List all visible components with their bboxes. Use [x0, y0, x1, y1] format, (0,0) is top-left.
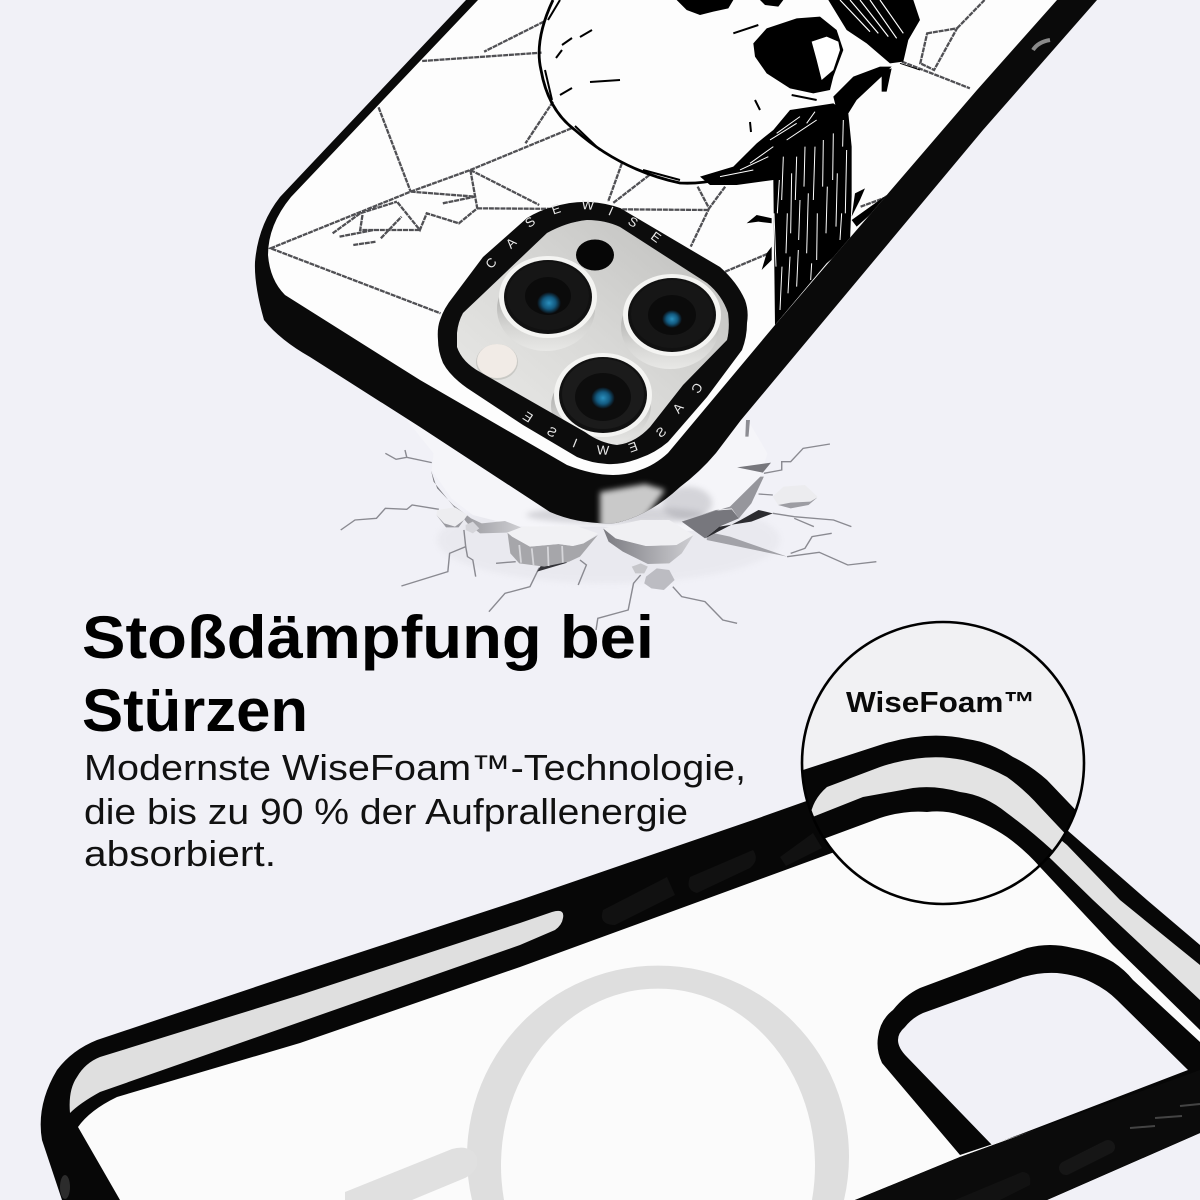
- camera cutout: [898, 973, 1188, 1145]
- buttons: [602, 833, 822, 925]
- case logo text bottom: S: [544, 423, 560, 441]
- case logo text bottom: C: [688, 380, 706, 396]
- body text: absorbiert.: [84, 833, 276, 874]
- magsafe ring: [467, 966, 849, 1200]
- lens 1: [497, 256, 597, 351]
- panda head outline: [538, 0, 708, 185]
- side button highlight: [1033, 40, 1050, 50]
- panda artwork: [271, 0, 985, 325]
- body text: die bis zu 90 % der Aufprallenergie: [84, 791, 688, 832]
- case logo text top: E: [648, 228, 664, 246]
- case logo text top: S: [522, 213, 538, 231]
- magnifier ring: [802, 622, 1084, 904]
- panda black markings: [677, 0, 920, 325]
- magnifier label: WiseFoam™: [846, 687, 1035, 719]
- heading: Stoßdämpfung bei: [82, 604, 654, 671]
- camera bump frame: [438, 202, 748, 464]
- case logo text bottom: I: [571, 435, 579, 451]
- top phone with case: [255, 0, 1097, 530]
- cracked floor impact: [341, 420, 876, 630]
- foam strip right: [1000, 790, 1200, 1000]
- case logo text top: W: [581, 197, 595, 213]
- phone case outer bumper: [255, 0, 1097, 523]
- lens 3: [551, 353, 652, 446]
- clear back panel: [78, 825, 1200, 1200]
- case logo text top: S: [625, 213, 641, 231]
- body text: Modernste WiseFoam™-Technologie,: [84, 747, 746, 788]
- body text: [84, 747, 746, 874]
- band texture: [1130, 1104, 1200, 1128]
- speaker port: [1066, 1147, 1108, 1168]
- lens 2: [621, 274, 721, 369]
- camera plate metal: [457, 220, 729, 445]
- magnified frame corner: [804, 736, 1075, 902]
- magnifier callout: [800, 620, 1086, 906]
- case frame black: [41, 770, 1200, 1200]
- case logo text top: I: [606, 203, 616, 219]
- magnifier fill: [802, 622, 1084, 904]
- case logo text bottom: E: [520, 408, 536, 426]
- volume key: [955, 1172, 1030, 1200]
- heading: [82, 604, 654, 744]
- bumper gloss highlight: [600, 484, 665, 530]
- heading: Stürzen: [82, 677, 308, 744]
- case logo text bottom: S: [653, 424, 669, 441]
- flash: [476, 344, 518, 380]
- case logo text bottom: E: [626, 438, 640, 456]
- case logo text bottom: [520, 380, 706, 458]
- case logo text top: C: [482, 255, 500, 271]
- bottom case interior: [41, 770, 1200, 1200]
- case back white: [268, 0, 1057, 475]
- lower band: [855, 1070, 1200, 1200]
- microphone hole: [576, 240, 614, 270]
- magsafe alignment pill: [345, 1148, 478, 1200]
- camera cutout frame: [878, 945, 1200, 1155]
- case logo text bottom: A: [669, 400, 687, 416]
- case logo text top: E: [550, 200, 563, 217]
- case logo text bottom: W: [596, 442, 610, 458]
- geometric sketch lines: [271, 0, 985, 313]
- case logo text top: [482, 197, 664, 271]
- foam strip left: [70, 911, 563, 1113]
- case logo text top: A: [503, 234, 520, 251]
- lanyard hole: [60, 1175, 70, 1199]
